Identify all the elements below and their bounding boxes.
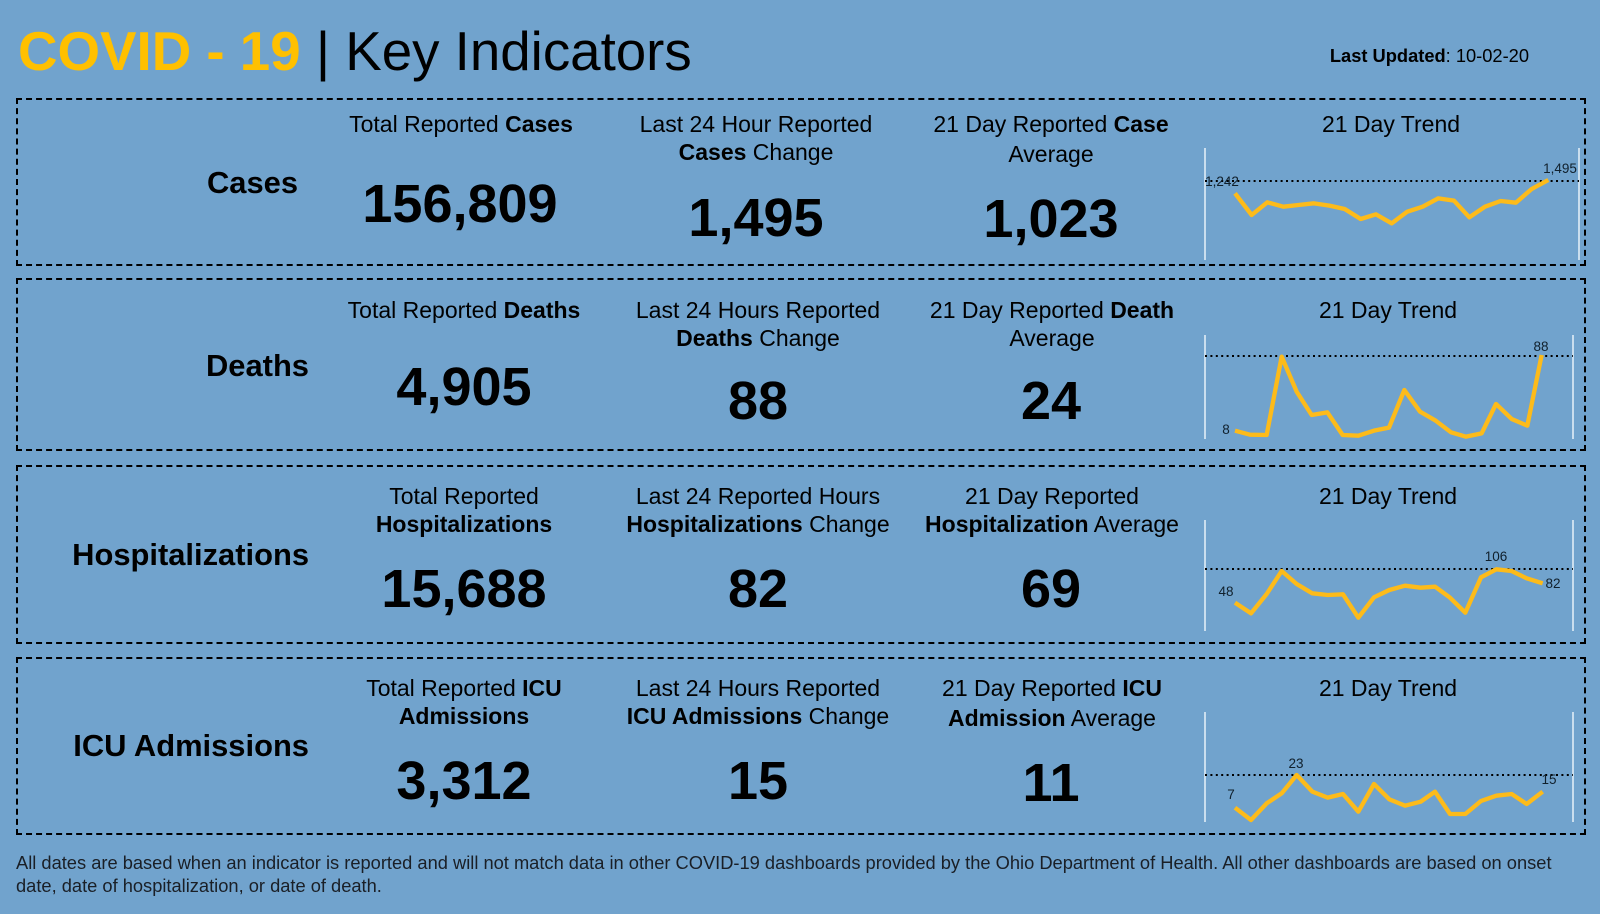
number: total ICU admissions: 3,312 xyxy=(396,751,532,811)
line chart: cases trend: 1,242 xyxy=(1205,174,1239,189)
text: 21 day ICU admission average label xyxy=(942,675,1162,731)
text: 21 day death average label: Average xyxy=(1009,325,1095,351)
line chart: cases trend: 1,495 xyxy=(1543,161,1577,176)
heading: ICU admissions trend: 21 Day Trend xyxy=(1319,675,1457,701)
number: total cases: 156,809 xyxy=(362,174,558,234)
text: last 24 hours ICU admissions label: ICU Admissions Change xyxy=(627,703,889,729)
line chart: deaths trend: 88 xyxy=(1533,339,1549,354)
line chart: hospitalizations trend: 106 xyxy=(1485,549,1507,564)
text: last 24 hours ICU admissions label: Last 24 Hours Reported xyxy=(636,675,880,701)
heading: deaths trend: 21 Day Trend xyxy=(1319,297,1457,323)
text: last 24 hour cases label: Cases Change xyxy=(679,139,833,165)
text: 21 day hospitalization average label: 21 Day Reported xyxy=(965,483,1139,509)
number: last 24 hours ICU admissions: 15 xyxy=(728,751,788,811)
row label: cases: Cases xyxy=(207,165,298,200)
text: last 24 hours hospitalizations label xyxy=(626,483,890,537)
text: last 24 hours deaths label: Deaths Change xyxy=(676,325,840,351)
text: total reported hospitalizations label: Total Reported xyxy=(389,483,539,509)
panel: ICU admissions xyxy=(16,657,1586,835)
row label: hospitalizations: Hospitalizations xyxy=(72,537,309,572)
text: last 24 hours ICU admissions label xyxy=(627,675,889,729)
line chart: ICU admissions trend: 7 xyxy=(1227,787,1235,802)
heading: cases trend: 21 Day Trend xyxy=(1322,111,1460,137)
row label: ICU admissions: ICU Admissions xyxy=(73,728,309,763)
line chart: hospitalizations trend: 48 xyxy=(1218,584,1234,599)
text: last 24 hours deaths label: Last 24 Hours Reported xyxy=(636,297,880,323)
text: 21 day case average label xyxy=(933,111,1169,167)
panel: cases xyxy=(16,98,1586,266)
number: 21 day death average: 24 xyxy=(1021,371,1081,431)
text: total reported ICU admissions label xyxy=(366,675,562,729)
number: last 24 hours deaths: 88 xyxy=(728,371,788,431)
footnote: All dates are based when an indicator is reported and will not match data in other COVID-19 dashboards provided by the Ohio Department of Health. All other dashboards are based on onset date, date of hospitalization, or date of death. xyxy=(16,852,1552,896)
text: last 24 hours deaths label xyxy=(636,297,880,351)
text: 21 day hospitalization average label: Hospitalization Average xyxy=(925,511,1179,537)
text: total reported hospitalizations label: Hospitalizations xyxy=(376,511,552,537)
number: 21 day ICU admission average: 11 xyxy=(1022,753,1080,813)
number: total hospitalizations: 15,688 xyxy=(381,559,547,619)
number: last 24 hours hospitalizations: 82 xyxy=(728,559,788,619)
line chart: ICU admissions trend: 23 xyxy=(1288,756,1304,771)
last updated date: Last Updated: 10-02-20 xyxy=(1330,45,1529,66)
text: last 24 hours hospitalizations label: Hospitalizations Change xyxy=(626,511,890,537)
text: total reported deaths label: Total Reported Deaths xyxy=(348,297,580,323)
text: total reported cases label: Total Reported Cases xyxy=(349,111,573,137)
number: total deaths: 4,905 xyxy=(396,357,532,417)
text: 21 day case average label: Average xyxy=(1008,141,1094,167)
line chart: deaths trend: 8 xyxy=(1222,422,1230,437)
text: total reported ICU admissions label: Total Reported ICU xyxy=(366,675,562,701)
text: last 24 hour cases label: Last 24 Hour Reported xyxy=(640,111,872,137)
line chart: hospitalizations trend xyxy=(1204,520,1574,631)
text: 21 day death average label xyxy=(930,297,1174,351)
text: 21 day ICU admission average label: Admission Average xyxy=(948,705,1156,731)
panel: hospitalizations xyxy=(16,465,1586,644)
line chart: ICU admissions trend: 15 xyxy=(1541,772,1557,787)
number: 21 day hospitalization average: 69 xyxy=(1021,559,1081,619)
line chart: ICU admissions trend xyxy=(1204,712,1574,822)
text: 21 day death average label: 21 Day Reported Death xyxy=(930,297,1174,323)
row label: deaths: Deaths xyxy=(206,348,309,383)
text: 21 day hospitalization average label xyxy=(925,483,1179,537)
line chart: cases trend xyxy=(1204,148,1580,260)
heading: hospitalizations trend: 21 Day Trend xyxy=(1319,483,1457,509)
text: 21 day case average label: 21 Day Reported Case xyxy=(933,111,1169,137)
panel: deaths xyxy=(16,278,1586,451)
text: last 24 hour cases label xyxy=(640,111,872,165)
line chart: hospitalizations trend: 82 xyxy=(1545,576,1561,591)
number: 21 day case average: 1,023 xyxy=(983,189,1119,249)
line chart: deaths trend xyxy=(1204,335,1574,439)
title: COVID - 19 | Key Indicators xyxy=(18,20,692,82)
text: total reported ICU admissions label: Admissions xyxy=(399,703,529,729)
text: 21 day ICU admission average label: 21 Day Reported ICU xyxy=(942,675,1162,701)
text: total reported hospitalizations label xyxy=(376,483,552,537)
text: last 24 hours hospitalizations label: Last 24 Reported Hours xyxy=(636,483,880,509)
number: last 24 hour cases: 1,495 xyxy=(688,188,824,248)
